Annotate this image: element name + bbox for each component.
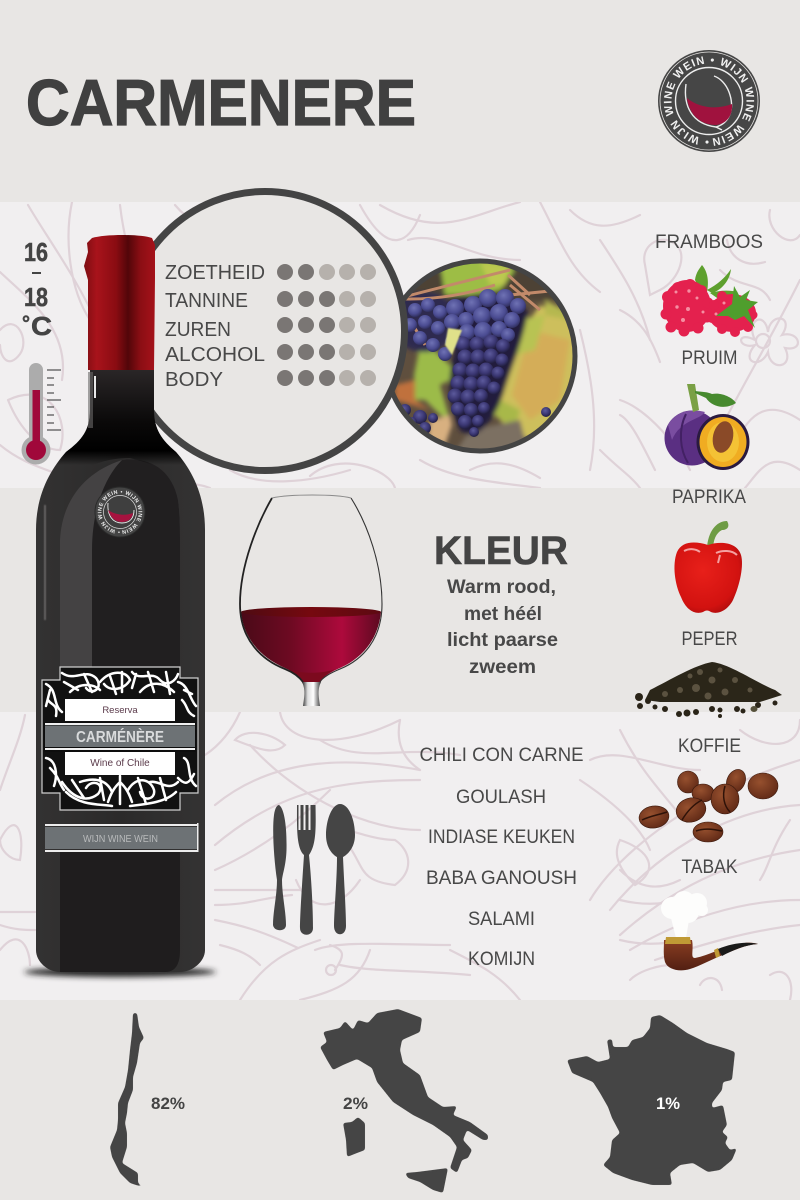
pairing list: KOMIJN <box>468 948 535 970</box>
map: france <box>567 1015 737 1185</box>
text: kleur description: zweem <box>469 657 536 678</box>
temperature <box>22 237 52 341</box>
label 2%: 2% <box>343 1095 368 1113</box>
aroma: peper: PEPER <box>682 628 738 650</box>
aroma: pruim <box>664 347 750 470</box>
map: italy <box>320 1009 488 1193</box>
icon: cutlery <box>273 804 355 935</box>
panel: taste profile circle <box>126 192 404 470</box>
aroma: paprika <box>672 486 746 613</box>
taste labels: BODY <box>165 369 223 391</box>
panel: floral band bottom <box>0 712 800 1000</box>
icon: thermometer <box>22 363 61 464</box>
label 82%: 82% <box>151 1095 185 1113</box>
spoon <box>326 804 355 934</box>
photo: grapes <box>392 258 578 454</box>
aroma: framboos <box>655 231 763 337</box>
wine label: CARMÉNÈRE <box>76 729 164 746</box>
label 1%: 1% <box>656 1095 680 1113</box>
taste labels: TANNINE <box>165 290 248 312</box>
text: kleur description <box>447 577 558 678</box>
bottle lower label <box>45 823 198 852</box>
text: kleur description: Warm rood, <box>447 577 556 598</box>
wine label: Reserva <box>102 705 138 716</box>
temperature: C <box>31 311 52 341</box>
bottle <box>22 235 218 982</box>
aroma: tabak: TABAK <box>682 856 738 878</box>
knife <box>273 805 287 930</box>
pairing list: SALAMI <box>468 908 535 930</box>
pairing list: BABA GANOUSH <box>426 867 577 889</box>
taste labels: ZUREN <box>165 319 231 341</box>
icon: wine glass <box>240 495 382 706</box>
title: CARMENERE <box>26 66 416 139</box>
wine label: Wine of Chile <box>90 758 150 769</box>
taste dot ratings <box>277 264 376 386</box>
aroma: koffie: KOFFIE <box>678 735 741 757</box>
heading: kleur: KLEUR <box>434 529 568 573</box>
bottle lower label: WIJN WINE WEIN <box>83 834 158 845</box>
text: kleur description: licht paarse <box>447 630 558 651</box>
aroma: tabak <box>661 856 758 970</box>
temperature: 16 <box>24 237 48 267</box>
aroma: framboos: FRAMBOOS <box>655 231 763 253</box>
taste labels: ALCOHOL <box>165 344 265 366</box>
panel: floral band top <box>0 202 800 488</box>
fork <box>297 805 316 935</box>
pairing list: GOULASH <box>456 786 546 808</box>
bottle capsule <box>84 235 155 370</box>
temperature: 18 <box>24 282 48 312</box>
bottle logo: • WIJN WINE WEIN • WIJN WINE WEIN <box>98 490 142 534</box>
pairing list: INDIASE KEUKEN <box>428 826 575 848</box>
aroma: paprika: PAPRIKA <box>672 486 746 508</box>
map: chile <box>110 1013 185 1188</box>
aroma: koffie <box>638 735 778 842</box>
wine label <box>42 667 198 810</box>
aroma: pruim: PRUIM <box>682 347 738 369</box>
taste labels: ZOETHEID <box>165 262 265 284</box>
icon: logo: • WIJN WINE WEIN • WIJN WINE WEIN <box>664 56 754 146</box>
text: kleur description: met héél <box>464 604 542 625</box>
temperature: ° <box>22 313 30 335</box>
pairing list: CHILI CON CARNE <box>420 744 584 766</box>
aroma: peper <box>635 628 782 718</box>
pairing list <box>420 744 584 970</box>
taste labels <box>165 262 265 391</box>
